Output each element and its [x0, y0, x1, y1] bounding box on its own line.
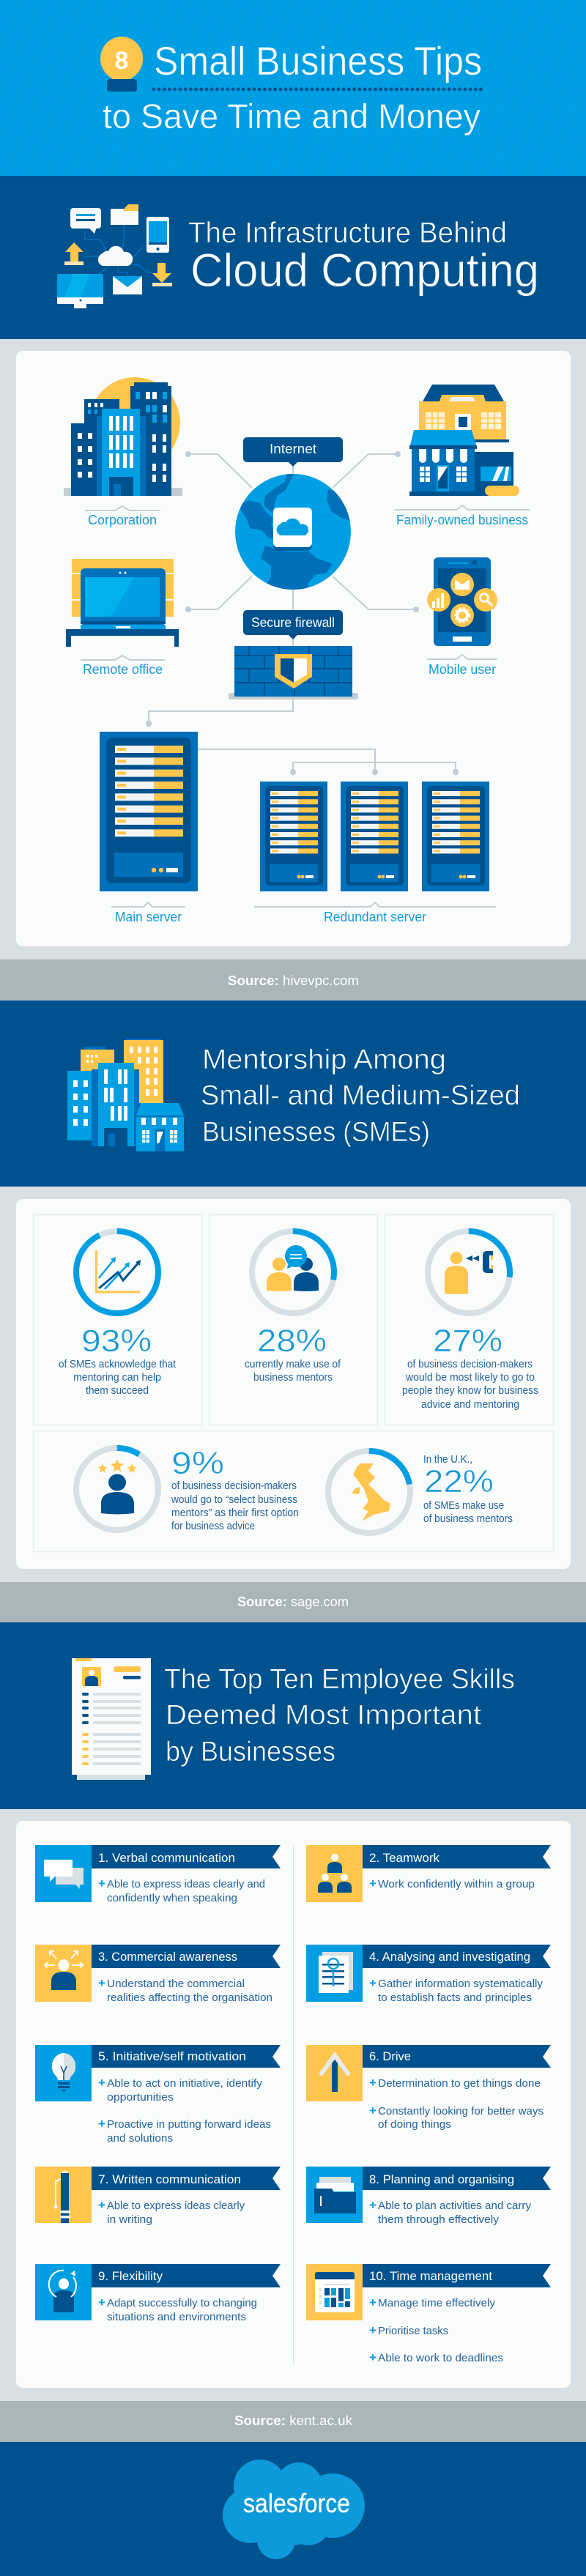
section heading [188, 217, 539, 297]
description: of SMEs acknowledge that [59, 1359, 176, 1370]
skill 6: drive: of doing things [378, 2118, 451, 2131]
description: currently make use of [245, 1359, 341, 1370]
statistic: 9% [171, 1446, 224, 1481]
icon: mobile user phone [427, 557, 497, 646]
skill 2: teamwork: Work confidently within a group [378, 1878, 535, 1890]
source bar: kent [0, 2401, 586, 2443]
icon: light bulb with number 8: 8 [115, 47, 128, 75]
section heading: by Businesses [166, 1737, 335, 1767]
skill 4: analysing and investigating: to establish facts and principles [378, 1992, 532, 2004]
main server [100, 732, 198, 891]
skill 3: commercial awareness: 3. Commercial awareness [98, 1950, 237, 1964]
description [171, 1480, 299, 1532]
dotted divider [154, 88, 485, 91]
skill 6: drive: + [369, 2076, 377, 2090]
skill 10: time management: Manage time effectively [378, 2297, 495, 2309]
skill 8: planning and organising: 8. Planning and organising [369, 2172, 514, 2186]
card: 28 percent [209, 1214, 378, 1425]
statistic: 28% [257, 1324, 327, 1359]
section header: employee skills [0, 1622, 586, 1809]
panel: employee skills [16, 1821, 571, 2388]
description: them succeed [86, 1385, 149, 1397]
skill 7: written communication [35, 2167, 281, 2226]
skill 7: written communication: + [98, 2198, 105, 2212]
donut: 27 percent [428, 1231, 510, 1313]
skill 8: planning and organising: them through effectively [378, 2213, 500, 2226]
description [245, 1359, 341, 1384]
skill 5: initiative and self motivation: + [98, 2076, 105, 2090]
skill 10: time management: Prioritise tasks [378, 2325, 448, 2337]
icon: light bulb with number 8 [100, 37, 143, 92]
section heading: Small- and Medium-Sized [201, 1080, 520, 1111]
source bar: sage [0, 1582, 586, 1622]
description [59, 1359, 176, 1397]
description: people they know for business [402, 1385, 538, 1397]
skill 5: initiative and self motivation [35, 2045, 281, 2145]
statistic: 22% [424, 1464, 494, 1499]
skill 1: verbal communication: + [98, 1877, 105, 1890]
skill 1: verbal communication: confidently when speaking [107, 1892, 237, 1904]
label: family-owned business [395, 505, 530, 527]
skill 5: initiative and self motivation: and solutions [107, 2132, 173, 2145]
panel: network infrastructure [16, 351, 571, 946]
section heading: Deemed Most Important [166, 1700, 481, 1731]
skill 9: flexibility: Adapt successfully to changing [107, 2297, 257, 2309]
section header: cloud computing [0, 176, 586, 339]
label: remote office: Remote office [83, 662, 163, 677]
description: would be most likely to go to [405, 1372, 535, 1384]
skill 9: flexibility: + [98, 2295, 105, 2309]
source bar: hivevpc [0, 959, 586, 1001]
icon: corporation buildings [64, 377, 182, 496]
description: of SMEs make use [423, 1500, 504, 1512]
skill 2: teamwork: 2. Teamwork [369, 1851, 440, 1865]
source bar: kent: Source: kent.ac.uk [234, 2413, 353, 2428]
skill 9: flexibility: situations and environments [107, 2311, 246, 2323]
label: remote office [81, 656, 165, 677]
skill 1: verbal communication: Able to express ideas clearly and [107, 1878, 265, 1890]
skill 9: flexibility [35, 2264, 281, 2323]
callout: internet [243, 437, 343, 467]
label: redundant server [254, 902, 496, 924]
logo: salesforce cloud [223, 2460, 365, 2559]
section heading [201, 1044, 520, 1148]
icon: city buildings [67, 1039, 185, 1151]
section heading: Cloud Computing [190, 244, 539, 297]
skill 10: time management: 10. Time management [369, 2269, 492, 2283]
skill 4: analysing and investigating: + [369, 1976, 377, 1990]
logo: salesforce cloud: salesforce [243, 2488, 350, 2518]
skill 2: teamwork: + [369, 1877, 377, 1890]
description: of business decision-makers [171, 1480, 297, 1492]
redundant servers [260, 782, 489, 891]
icon: globe with cloud [235, 472, 352, 597]
statistic: 27% [433, 1324, 502, 1359]
description: business mentors [253, 1372, 333, 1384]
title line two: to Save Time and Money [103, 97, 481, 136]
description: of business decision-makers [407, 1359, 533, 1370]
icon: remote office laptop [66, 559, 179, 647]
section heading: Businesses (SMEs) [202, 1117, 430, 1148]
label: main server [111, 902, 185, 924]
description: advice and mentoring [421, 1399, 519, 1411]
skill 10: time management [306, 2264, 551, 2364]
description: would go to “select business [171, 1494, 297, 1506]
card: 93 percent [34, 1214, 202, 1425]
skill 4: analysing and investigating: 4. Analysing and investigating [369, 1950, 530, 1964]
skill 6: drive: Determination to get things done [378, 2077, 541, 2090]
skill 7: written communication: in writing [107, 2213, 152, 2226]
label: corporation [85, 506, 160, 527]
skill 5: initiative and self motivation: + [98, 2117, 105, 2131]
skill 5: initiative and self motivation: Able to act on initiative, identify [107, 2077, 263, 2090]
label: mobile user [427, 655, 497, 677]
footer band [0, 2442, 586, 2576]
skill 6: drive: + [369, 2104, 377, 2117]
skill 9: flexibility: 9. Flexibility [98, 2269, 163, 2283]
section heading [164, 1664, 515, 1767]
title line one: Small Business Tips [154, 38, 482, 83]
description: mentors” as their first option [171, 1507, 299, 1519]
description: of business mentors [423, 1513, 513, 1525]
icon: resume [72, 1658, 151, 1780]
donut: 22 percent with UK map [328, 1451, 410, 1533]
skill 8: planning and organising: Able to plan activities and carry [378, 2200, 531, 2212]
section heading: Mentorship Among [202, 1044, 446, 1075]
icon cluster: cloud services [57, 204, 172, 308]
connector lines [146, 451, 459, 775]
skill 7: written communication: 7. Written communication [98, 2172, 241, 2186]
title banner [0, 0, 586, 176]
skill 8: planning and organising: + [369, 2198, 377, 2212]
icon: firewall with shield [229, 646, 358, 699]
callout: secure firewall: Secure firewall [251, 615, 335, 630]
donut: 9 percent [76, 1448, 158, 1530]
section heading: The Top Ten Employee Skills [164, 1664, 515, 1695]
description: In the U.K., [423, 1454, 472, 1466]
skill 2: teamwork [306, 1845, 551, 1902]
skill 10: time management: + [369, 2295, 377, 2309]
description: for business advice [171, 1521, 255, 1532]
skill 5: initiative and self motivation: Proactive in putting forward ideas [107, 2118, 271, 2131]
skill 5: initiative and self motivation: 5. Initiative/self motivation [98, 2049, 246, 2063]
skill 3: commercial awareness: realities affecting the organisation [107, 1992, 272, 2004]
callout: secure firewall [243, 610, 343, 639]
skill 6: drive [306, 2045, 551, 2131]
skill 10: time management: Able to work to deadlines [378, 2352, 503, 2364]
card: 9 and 22 percent [34, 1431, 554, 1551]
skill 7: written communication: Able to express ideas clearly [107, 2200, 245, 2212]
source bar: hivevpc: Source: hivevpc.com [228, 973, 359, 988]
label: main server: Main server [115, 910, 182, 924]
section header: mentorship [0, 1001, 586, 1187]
description [402, 1359, 538, 1411]
skill 6: drive: 6. Drive [369, 2049, 411, 2063]
callout: internet: Internet [270, 442, 316, 456]
skill 8: planning and organising [306, 2167, 551, 2226]
skill 4: analysing and investigating [306, 1945, 551, 2004]
skill 5: initiative and self motivation: opportunities [107, 2091, 174, 2104]
label: redundant server: Redundant server [324, 910, 426, 924]
skill 6: drive: Constantly looking for better ways [378, 2105, 544, 2117]
statistic: 93% [81, 1324, 152, 1359]
skill 10: time management: + [369, 2350, 377, 2364]
donut: 93 percent [76, 1231, 158, 1313]
label: family-owned business: Family-owned business [396, 513, 528, 527]
section heading: The Infrastructure Behind [188, 217, 507, 249]
description: mentoring can help [73, 1372, 161, 1384]
skill 3: commercial awareness [35, 1945, 281, 2004]
source bar: sage: Source: sage.com [237, 1595, 349, 1609]
skill 4: analysing and investigating: Gather information systematically [378, 1978, 544, 1990]
skill 1: verbal communication [35, 1845, 281, 1904]
donut: 28 percent [252, 1231, 334, 1313]
icon: family-owned business [409, 385, 519, 496]
skill 3: commercial awareness: Understand the commercial [107, 1978, 245, 1990]
card: 27 percent [385, 1214, 554, 1425]
skill 3: commercial awareness: + [98, 1976, 105, 1990]
label: corporation: Corporation [88, 513, 157, 527]
skill 1: verbal communication: 1. Verbal communication [98, 1851, 235, 1865]
panel: mentorship statistics [16, 1199, 571, 1569]
skill 10: time management: + [369, 2323, 377, 2337]
label: mobile user: Mobile user [429, 662, 496, 677]
description [423, 1500, 513, 1525]
